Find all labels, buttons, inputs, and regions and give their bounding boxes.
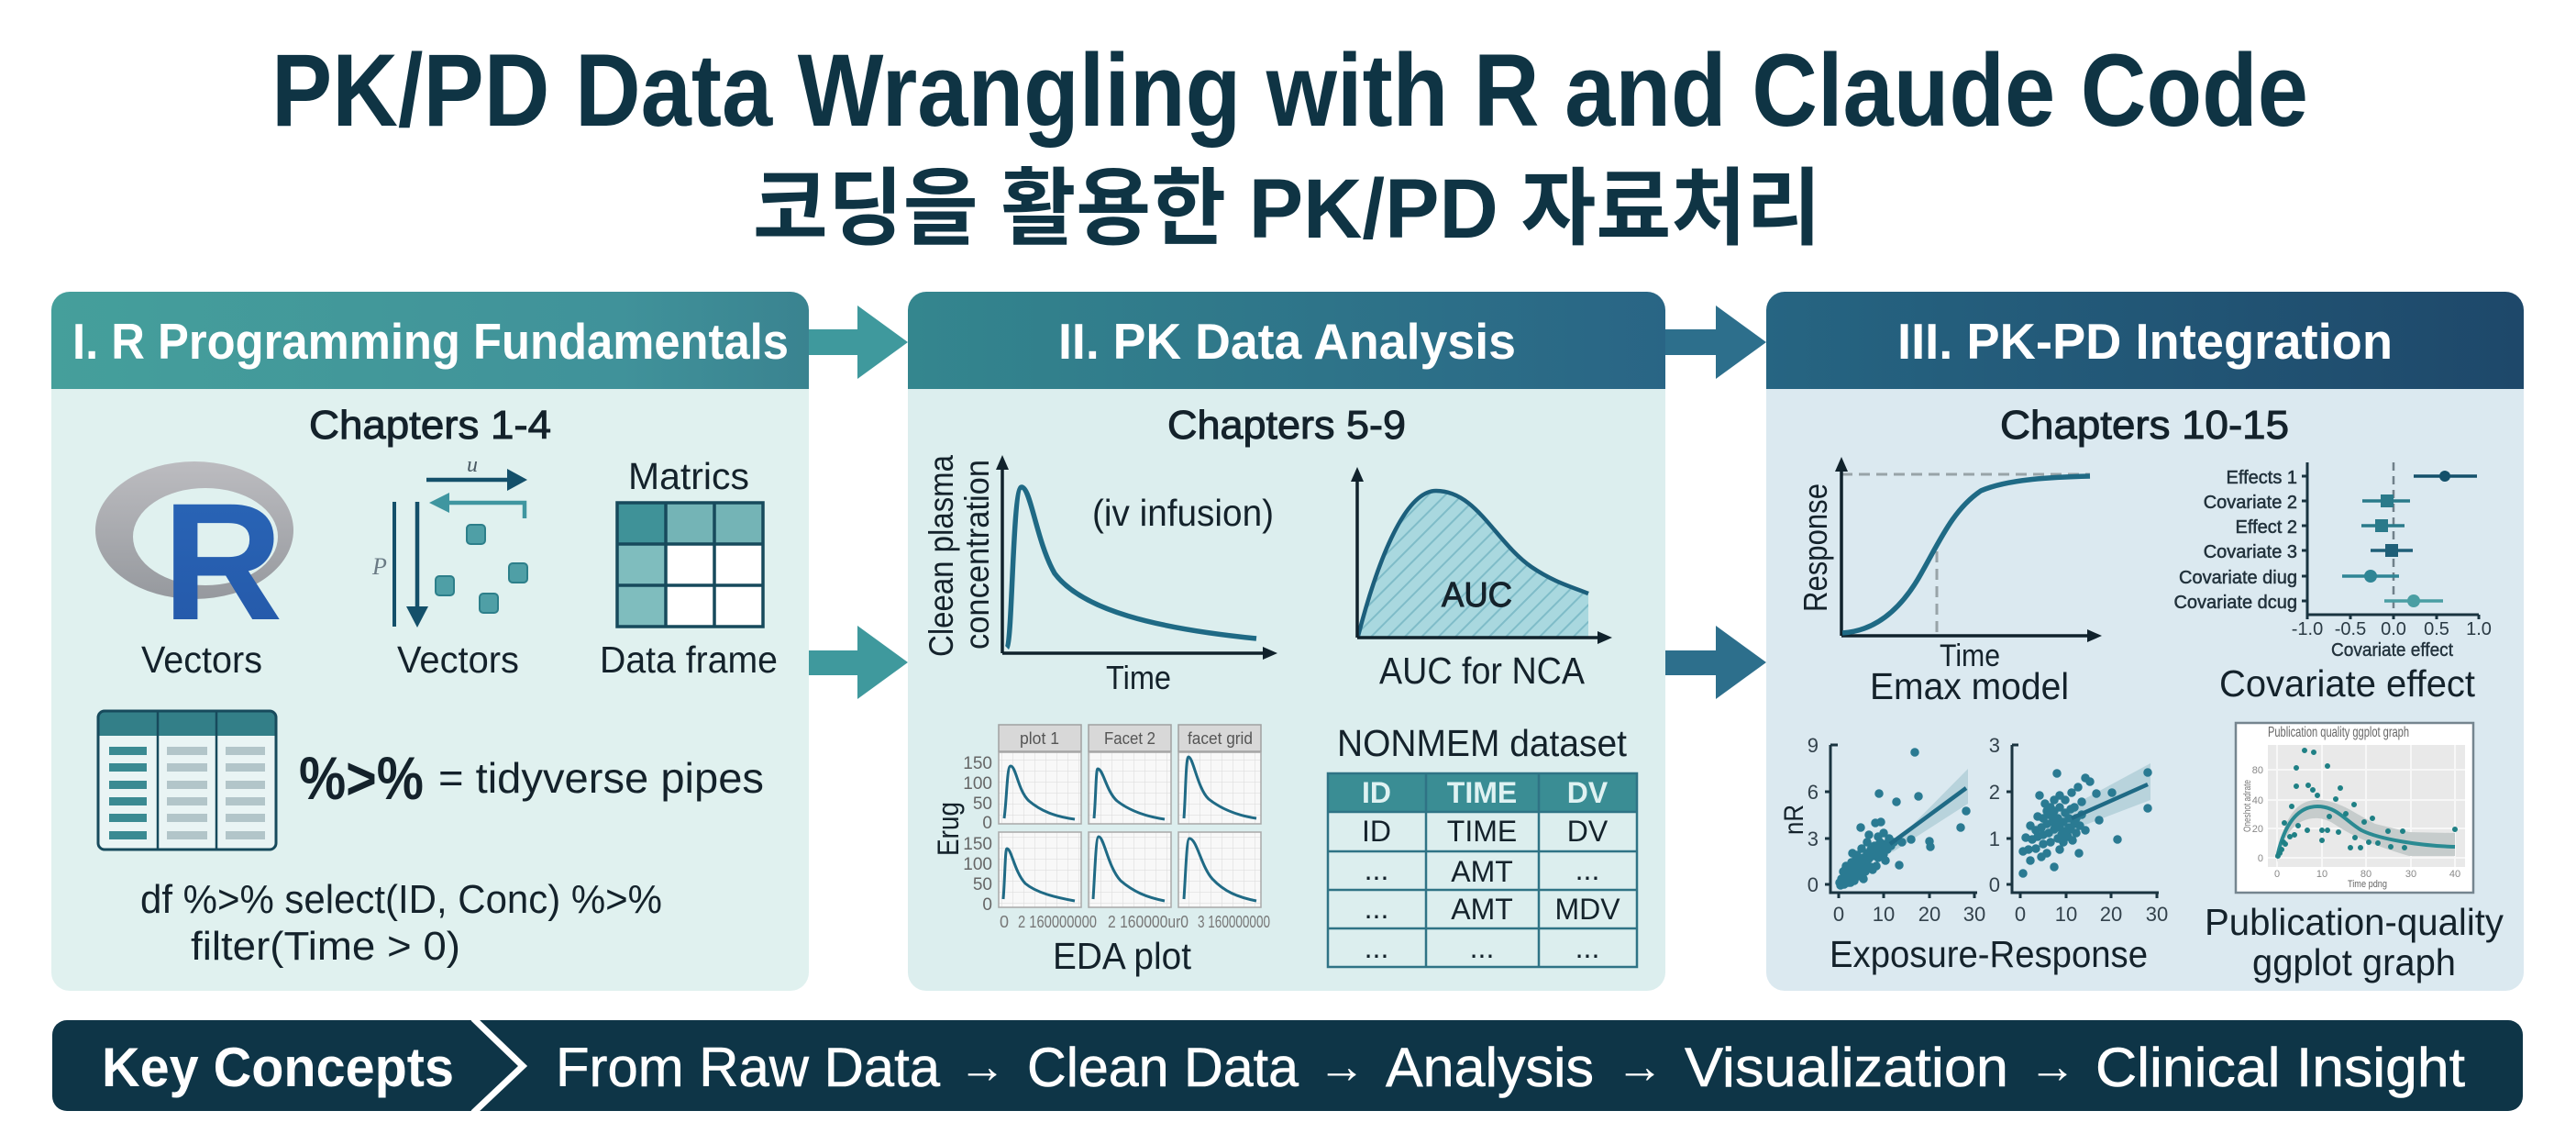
chart: AUC: [1351, 467, 1612, 644]
pipe operator: %>%: [299, 744, 424, 812]
label: ggplot graph: ggplot graph: [2252, 941, 2456, 983]
chart: exposure-response scatter 2: 0: [2015, 903, 2026, 926]
chart: covariate forest plot: Covariate 3: [2204, 542, 2297, 562]
chart: publication-quality ggplot: 0: [2258, 853, 2263, 864]
icon: vector diagram: [371, 453, 527, 628]
chart: exposure-response scatter 2: 2: [1989, 781, 2000, 804]
workflow steps: Visualization: [1685, 1037, 2008, 1098]
chart: Emax model: Time: [1940, 639, 2000, 673]
chart: EDA facet plots: 2 160000000: [1018, 913, 1097, 931]
chart: covariate forest plot: [2173, 462, 2492, 661]
table: NONMEM dataset: ID: [1362, 815, 1391, 848]
label: Emax model: Emax model: [1870, 665, 2069, 707]
chart: EDA facet plots: 150: [963, 754, 992, 773]
subtitle: 코딩을 활용한 PK/PD 자료처리: [753, 162, 1821, 256]
chart: plasma concentration curve: (iv infusion): [1092, 492, 1274, 534]
chart: exposure-response scatter 2: 0: [1989, 873, 2000, 896]
table: NONMEM dataset: ...: [1365, 931, 1388, 964]
chart: exposure-response scatter 1: 0: [1833, 903, 1844, 926]
table: NONMEM dataset: ...: [1575, 853, 1599, 886]
label: matrics: Matrics: [628, 455, 749, 497]
label: vectors: Vectors: [141, 639, 262, 681]
code line 2: filter(Time > 0): [191, 924, 460, 969]
icon: matrix grid: [617, 503, 763, 627]
workflow steps: [556, 1037, 2465, 1098]
table: NONMEM dataset: AMT: [1451, 855, 1513, 888]
heading: III. PK-PD Integration: [1897, 313, 2393, 370]
chart: publication-quality ggplot: 30: [2405, 869, 2416, 880]
chart: AUC: AUC: [1442, 576, 1512, 615]
icon: data table: [98, 711, 276, 850]
chapter range: Chapters 10-15: [2000, 403, 2289, 448]
table: NONMEM dataset: TIME: [1447, 776, 1517, 809]
chart: publication-quality ggplot: 80: [2360, 869, 2371, 880]
chart: covariate forest plot: -1.0: [2292, 619, 2323, 639]
chart: publication-quality ggplot: Oneshot adrate: [2242, 780, 2253, 832]
icon: R logo: [95, 461, 293, 655]
chart: plasma concentration curve: Cleean plasma: [923, 455, 960, 657]
chart: publication-quality ggplot: Publication quality ggplot graph: [2268, 725, 2409, 740]
heading: II. PK Data Analysis: [1058, 313, 1516, 370]
label: publication-quality: Publication-quality: [2205, 901, 2504, 943]
chart: exposure-response scatter 1: 9: [1808, 734, 1819, 757]
panel header: [51, 292, 809, 389]
chart: exposure-response scatter 1: 6: [1808, 781, 1819, 804]
chart: plasma concentration curve: Time: [1106, 659, 1171, 696]
icon: vector diagram: u: [467, 453, 478, 477]
table: NONMEM dataset: ...: [1575, 931, 1599, 964]
chart: EDA facet plots: 100: [963, 855, 992, 874]
label: NONMEM dataset: NONMEM dataset: [1337, 722, 1628, 764]
chart: plasma concentration curve: [923, 455, 1277, 696]
title: PK/PD Data Wrangling with R and Claude Code: [271, 33, 2308, 148]
chart: exposure-response scatter 2: 30: [2146, 903, 2168, 926]
chart: publication-quality ggplot: [2236, 723, 2473, 893]
chart: publication-quality ggplot: 0: [2274, 869, 2280, 880]
chart: covariate forest plot: -0.5: [2335, 619, 2366, 639]
chart: publication-quality ggplot: 40: [2449, 869, 2460, 880]
chart: EDA facet plots: Erug: [932, 802, 965, 856]
chart: EDA facet plots: 0: [982, 895, 992, 915]
chart: EDA facet plots: 50: [973, 875, 992, 894]
chart: exposure-response scatter 1: 20: [1918, 903, 1940, 926]
chart: EDA facet plots: 2 160000ur0: [1108, 913, 1188, 931]
table: NONMEM dataset: AMT: [1451, 893, 1513, 926]
chart: exposure-response scatter 1: 30: [1963, 903, 1985, 926]
chart: exposure-response scatter 1: [1779, 734, 1985, 926]
workflow steps: Clinical Insight: [2095, 1037, 2465, 1098]
label: vectors: Vectors: [397, 639, 519, 681]
table: NONMEM dataset: DV: [1567, 815, 1609, 848]
chart: covariate forest plot: Covariate effect: [2331, 640, 2453, 661]
chart: EDA facet plots: 0: [1000, 913, 1009, 931]
workflow steps: From Raw Data: [556, 1037, 941, 1098]
panel header: [1766, 292, 2524, 389]
chart: EDA facet plots: 150: [963, 835, 992, 854]
icon: R logo: R: [162, 468, 282, 655]
label: covariate effect: Covariate effect: [2219, 662, 2476, 705]
workflow steps: Analysis: [1386, 1037, 1594, 1098]
chart: EDA facet plots: 3 160000000: [1198, 913, 1270, 931]
chart: exposure-response scatter 1: 3: [1808, 828, 1819, 850]
chart: EDA facet plots: [932, 725, 1270, 931]
table: NONMEM dataset: [1328, 773, 1637, 967]
chart: exposure-response scatter 2: [1989, 734, 2168, 926]
key concepts bar: [52, 1018, 2523, 1113]
table: NONMEM dataset: TIME: [1447, 815, 1517, 848]
pipe description: = tidyverse pipes: [438, 754, 764, 802]
panel: PK-PD integration: [1766, 292, 2524, 991]
table: NONMEM dataset: ...: [1470, 931, 1494, 964]
panel: R programming fundamentals: [51, 292, 809, 991]
label: exposure-response: Exposure-Response: [1830, 933, 2148, 975]
chart: exposure-response scatter 1: 10: [1873, 903, 1895, 926]
table: NONMEM dataset: ...: [1365, 853, 1388, 886]
chart: publication-quality ggplot: 10: [2316, 869, 2327, 880]
label: AUC for NCA: AUC for NCA: [1379, 650, 1586, 692]
label: EDA plot: EDA plot: [1053, 935, 1192, 977]
chart: Emax model: Response: [1797, 483, 1834, 612]
chart: covariate forest plot: 1.0: [2466, 619, 2492, 639]
label: data frame: Data frame: [600, 639, 778, 681]
chart: publication-quality ggplot: Time pdng: [2348, 879, 2387, 890]
chart: EDA facet plots: Facet 2: [1104, 729, 1155, 748]
panel: PK data analysis: [908, 292, 1665, 991]
chart: EDA facet plots: facet grid: [1188, 729, 1253, 748]
arrow: panel 1 to panel 2, bottom: [809, 626, 908, 699]
chart: covariate forest plot: 0.0: [2381, 619, 2406, 639]
table: NONMEM dataset: ID: [1362, 776, 1391, 809]
chapter range: Chapters 1-4: [309, 403, 551, 448]
arrow: panel 2 to panel 3, bottom: [1665, 626, 1766, 699]
chart: covariate forest plot: Covariate diug: [2179, 568, 2297, 588]
icon: vector diagram: P: [371, 553, 387, 580]
workflow steps: →: [1318, 1040, 1365, 1094]
chart: exposure-response scatter 1: 0: [1808, 873, 1819, 896]
chart: covariate forest plot: Covariate dcug: [2173, 593, 2297, 613]
chart: covariate forest plot: Effect 2: [2236, 517, 2297, 538]
code line 1: df %>% select(ID, Conc) %>%: [140, 877, 662, 922]
table: NONMEM dataset: ...: [1365, 892, 1388, 925]
chart: exposure-response scatter 2: 1: [1989, 828, 2000, 850]
chart: publication-quality ggplot: 40: [2252, 795, 2263, 806]
workflow steps: →: [2029, 1040, 2076, 1094]
chart: publication-quality ggplot: 80: [2252, 765, 2263, 776]
arrow: panel 2 to panel 3, top: [1665, 305, 1766, 379]
chart: plasma concentration curve: concentration: [958, 460, 996, 650]
chart: covariate forest plot: Covariate 2: [2204, 493, 2297, 513]
chart: EDA facet plots: 0: [982, 814, 992, 833]
table: NONMEM dataset: DV: [1567, 776, 1609, 809]
key concepts label: Key Concepts: [102, 1037, 454, 1098]
chevron divider: [473, 1018, 523, 1113]
workflow steps: →: [1616, 1040, 1664, 1094]
workflow steps: Clean Data: [1027, 1037, 1299, 1098]
chart: EDA facet plots: 50: [973, 794, 992, 814]
chart: exposure-response scatter 2: 10: [2055, 903, 2077, 926]
workflow steps: →: [958, 1040, 1006, 1094]
chart: exposure-response scatter 1: nR: [1779, 805, 1809, 835]
table: NONMEM dataset: MDV: [1554, 893, 1620, 926]
panel header: [908, 292, 1665, 389]
chart: covariate forest plot: 0.5: [2424, 619, 2449, 639]
chart: covariate forest plot: Effects 1: [2227, 468, 2297, 488]
arrow: panel 1 to panel 2, top: [809, 305, 908, 379]
chart: exposure-response scatter 2: 20: [2100, 903, 2122, 926]
chart: EDA facet plots: 100: [963, 774, 992, 794]
chart: EDA facet plots: plot 1: [1020, 729, 1059, 748]
chart: Emax model: [1797, 457, 2102, 673]
chart: exposure-response scatter 2: 3: [1989, 734, 2000, 757]
chart: publication-quality ggplot: 20: [2252, 824, 2263, 835]
heading: I. R Programming Fundamentals: [72, 313, 789, 370]
chapter range: Chapters 5-9: [1167, 403, 1406, 448]
